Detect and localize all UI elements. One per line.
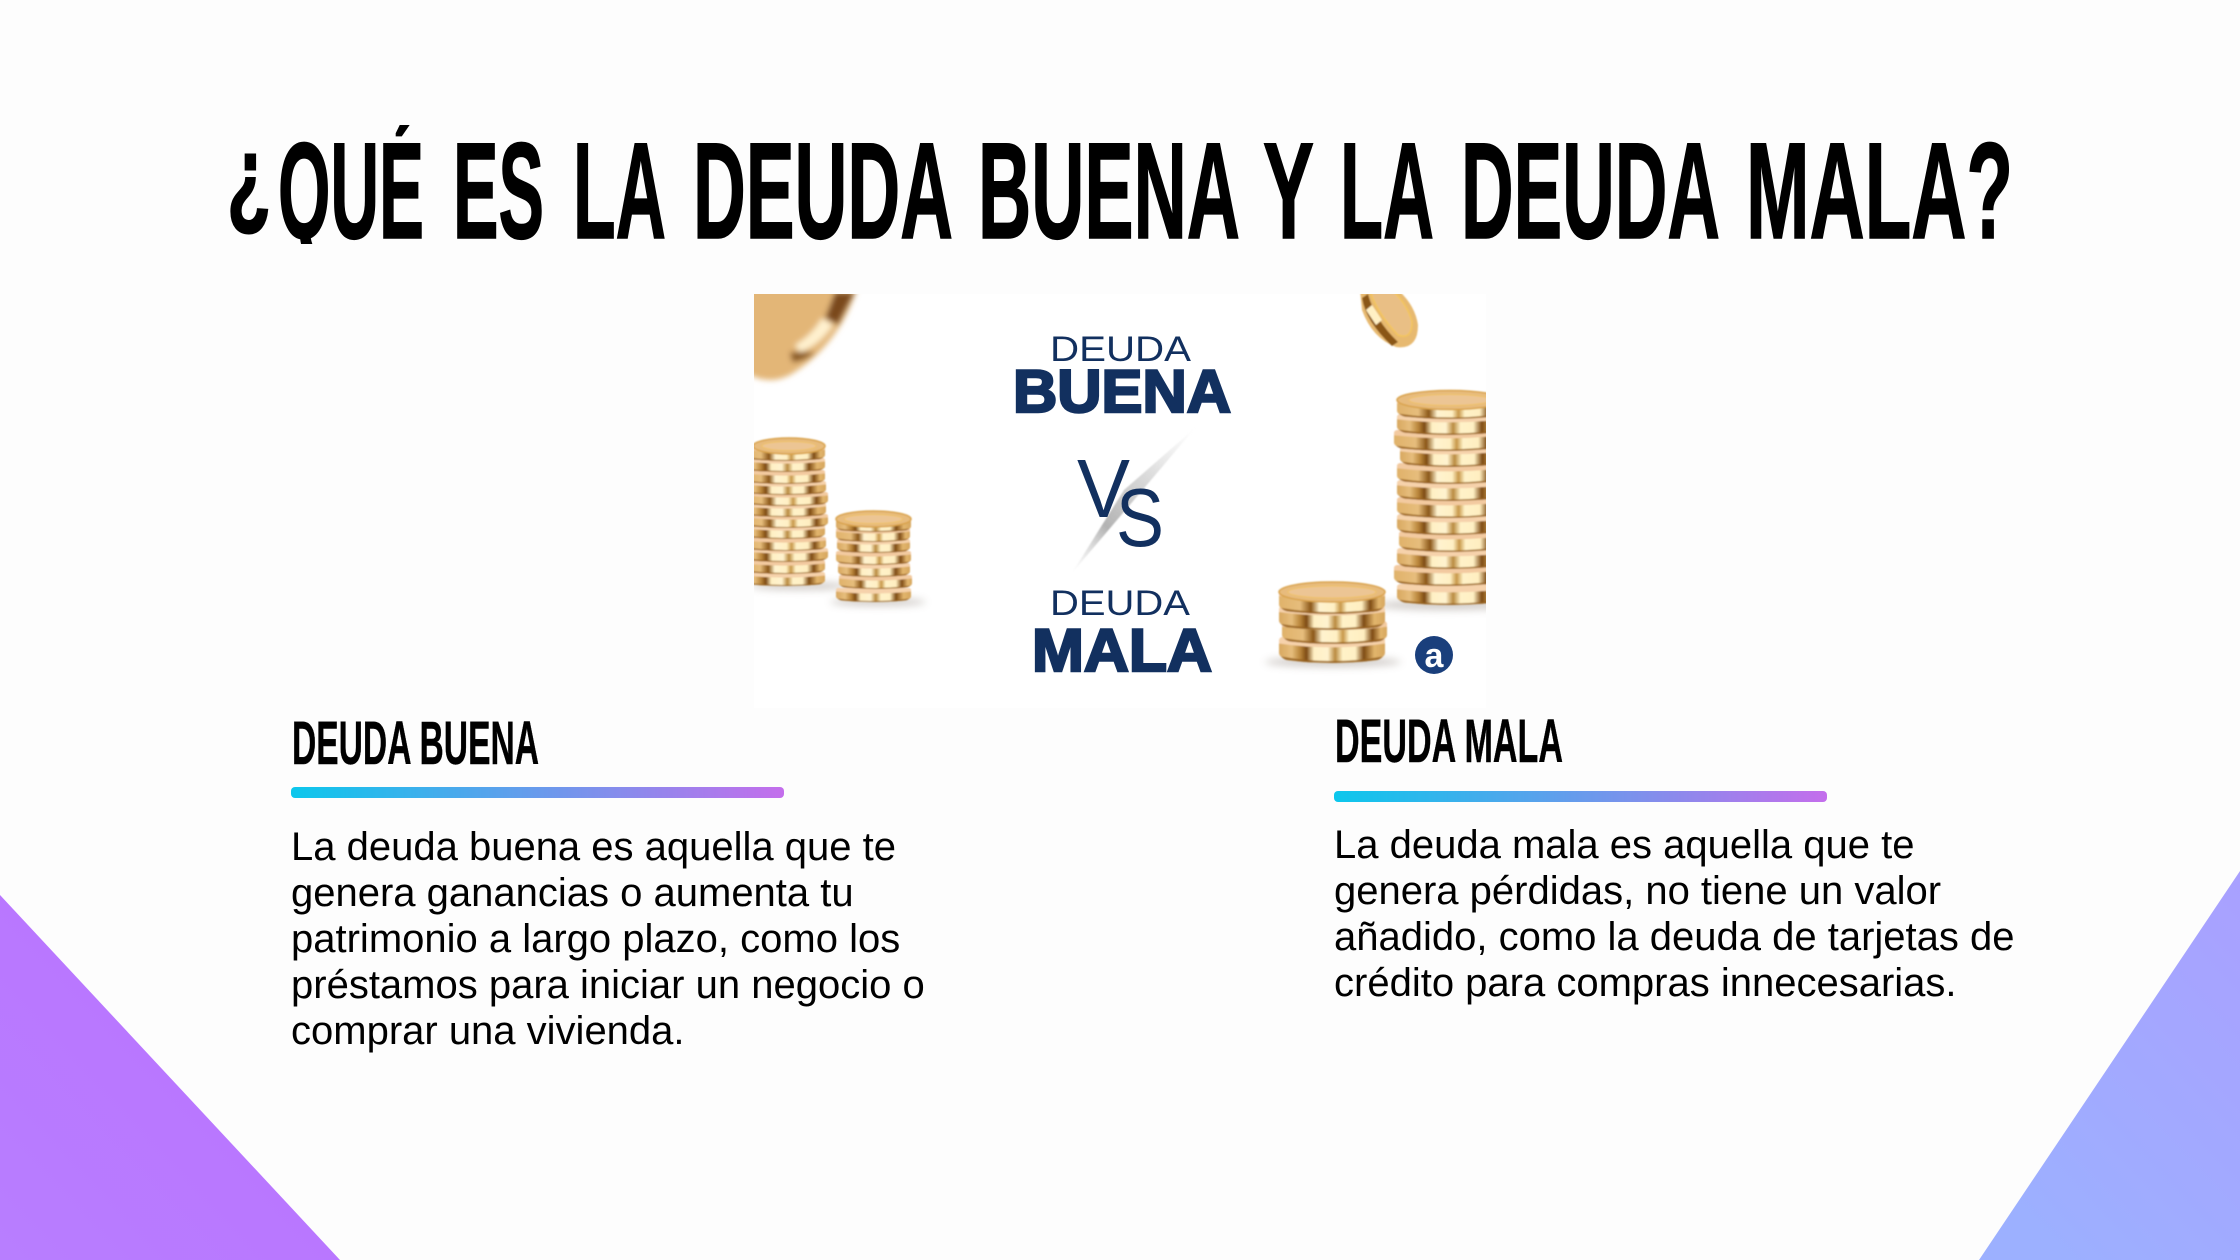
coin stack: left short bbox=[836, 511, 912, 602]
title: ¿ bbox=[227, 112, 271, 238]
background triangle: bottom left bbox=[0, 895, 340, 1260]
title: Y bbox=[1263, 115, 1314, 268]
title: DEUDA bbox=[693, 115, 953, 268]
label: deuda buena: DEUDA bbox=[1050, 330, 1192, 369]
title: QUÉ bbox=[278, 115, 424, 268]
underline: deuda buena bbox=[291, 787, 784, 798]
title: ES bbox=[453, 115, 544, 268]
text block: deuda buena: La deuda buena es aquella que te genera ganancias o aumenta tu patrimonio a largo plazo, como los préstamos para iniciar un negocio o comprar una vivienda. bbox=[291, 824, 925, 1052]
background triangle: bottom right bbox=[1979, 871, 2240, 1260]
title bbox=[230, 125, 2009, 244]
coin stack: right tall bbox=[1393, 388, 1486, 606]
vs mark: S bbox=[1116, 471, 1164, 564]
heading: deuda buena: DEUDA BUENA bbox=[292, 709, 539, 777]
blurred coin top left bbox=[754, 294, 860, 384]
title: DEUDA bbox=[1461, 115, 1720, 268]
text block: deuda mala: La deuda mala es aquella que te genera pérdidas, no tiene un valor añadido, como la deuda de tarjetas de crédito para compras innecesarias. bbox=[1334, 822, 2014, 1004]
falling coin top right bbox=[1360, 290, 1418, 347]
title: LA bbox=[573, 115, 666, 268]
central image: deuda buena vs deuda mala bbox=[754, 294, 1486, 674]
label: deuda buena: BUENA bbox=[1013, 358, 1231, 425]
label: deuda mala: MALA bbox=[1032, 617, 1212, 684]
vs mark bbox=[1077, 460, 1161, 547]
title: MALA? bbox=[1746, 115, 2013, 268]
soft coin shadows bbox=[750, 582, 1515, 667]
label: deuda buena bbox=[1016, 336, 1232, 414]
coin stack: right short bbox=[1279, 582, 1387, 663]
coin stack: left tall bbox=[744, 438, 828, 586]
title: LA bbox=[1340, 115, 1434, 268]
vs mark: V bbox=[1077, 442, 1130, 535]
icon: brand logo bbox=[1415, 636, 1453, 675]
heading: deuda mala: DEUDA MALA bbox=[1335, 707, 1563, 775]
label: deuda mala: DEUDA bbox=[1050, 584, 1191, 623]
underline: deuda mala bbox=[1334, 791, 1827, 802]
diagonal slash behind vs bbox=[1079, 442, 1181, 563]
icon: brand logo: a bbox=[1425, 637, 1445, 675]
title: BUENA bbox=[978, 115, 1240, 268]
label: deuda mala bbox=[1034, 590, 1212, 672]
